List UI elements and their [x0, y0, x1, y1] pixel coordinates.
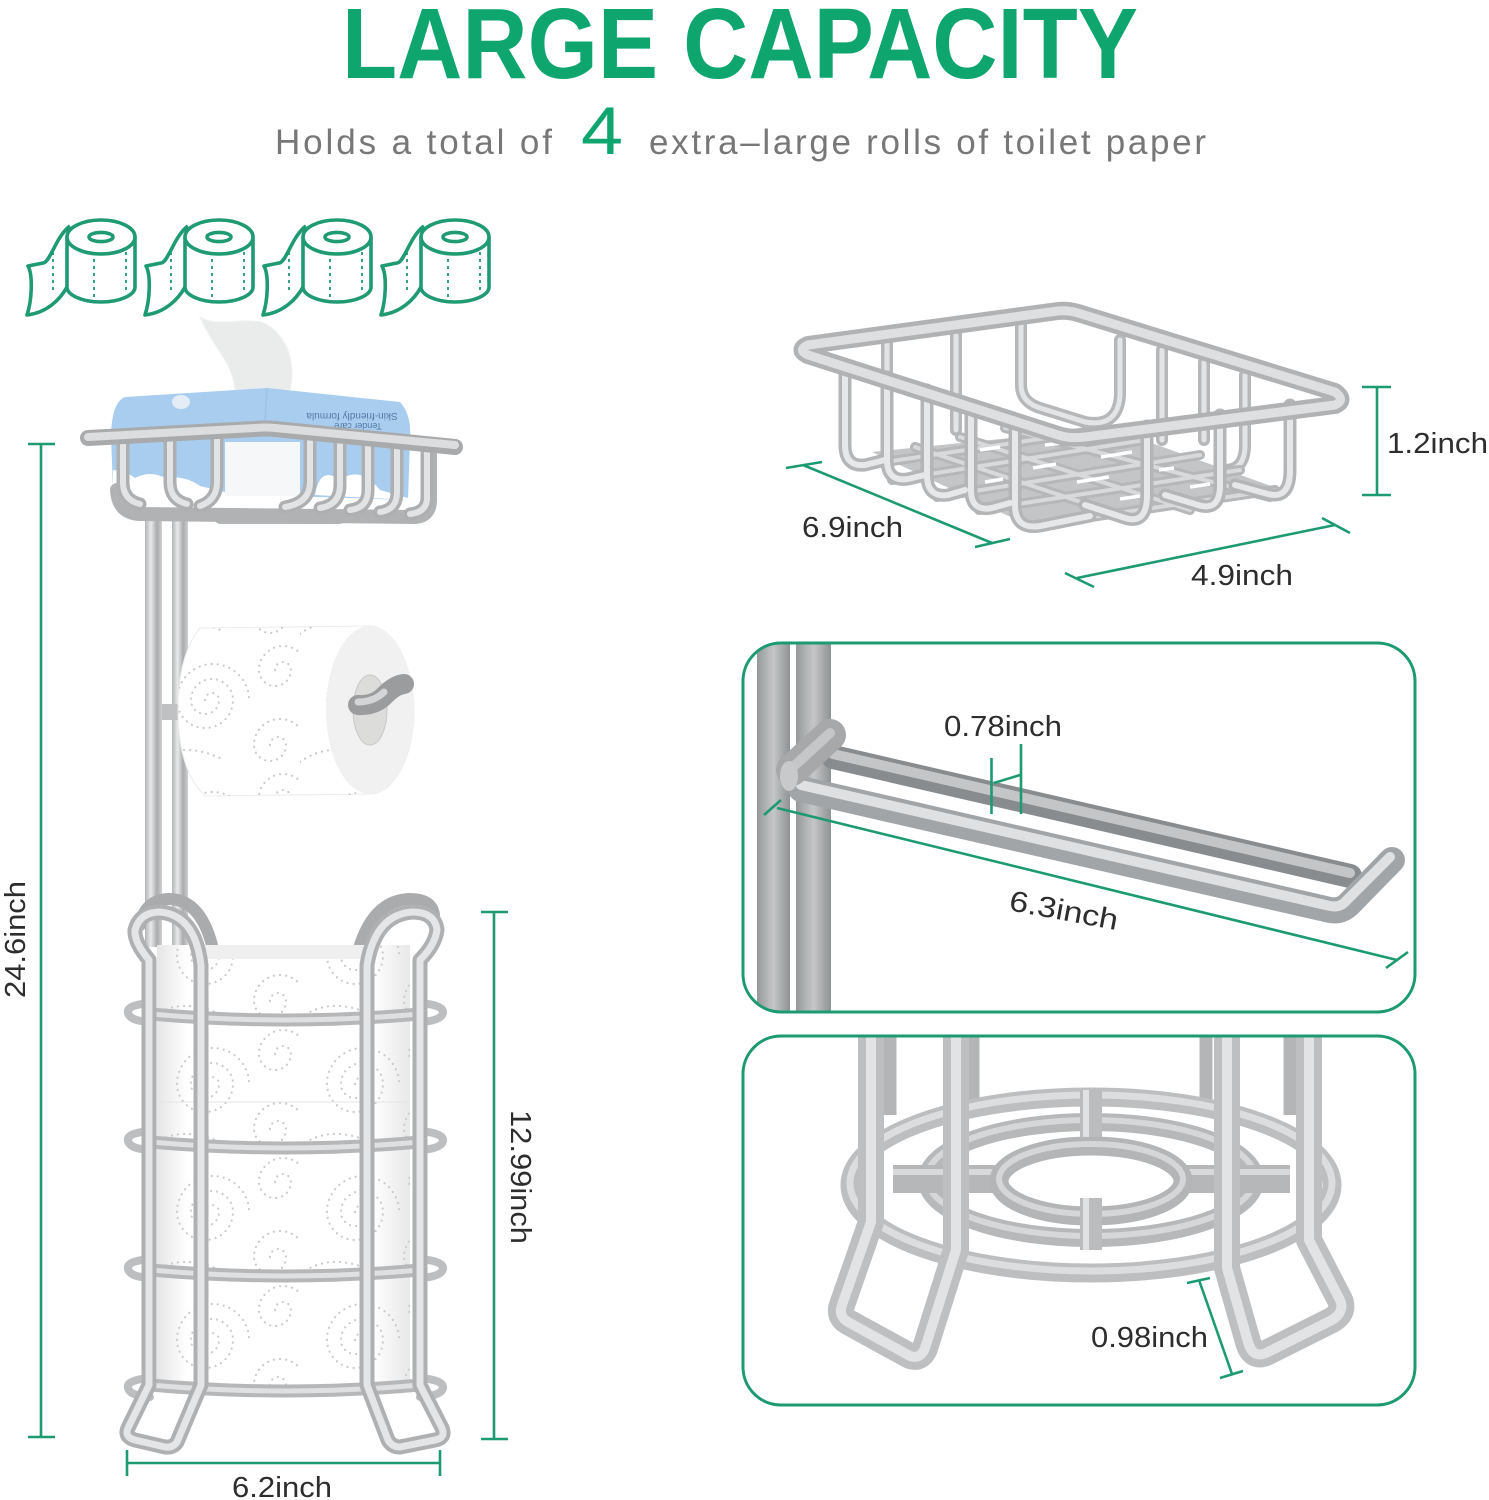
wipes package: [111, 388, 410, 500]
wire shelf basket: [88, 428, 455, 524]
panel border: [743, 1036, 1415, 1405]
subtitle: [275, 93, 1206, 169]
stand posts: [145, 512, 188, 947]
dimension: 6.3inch: [764, 800, 1408, 968]
lower basket holding rolls: [127, 899, 443, 1447]
dimension: 6.9inch: 6.9inch: [802, 512, 903, 544]
tissue pulled from wipes pack: [200, 317, 292, 390]
icon: toilet roll 2: [145, 220, 253, 315]
product: full stand: [88, 317, 455, 1447]
dimension: height 24.6inch: 24.6inch: [0, 881, 32, 998]
dimension: 6.3inch: 6.3inch: [1007, 885, 1121, 937]
subtitle: extra–large rolls of toilet paper: [649, 123, 1206, 162]
back arches: [140, 899, 434, 945]
icon: toilet roll 3: [263, 220, 371, 315]
stacked rolls: [157, 945, 410, 1392]
dimension: 1.2inch: [1362, 387, 1488, 495]
dimension: 4.9inch: 4.9inch: [1191, 560, 1293, 592]
horizontal rings: [128, 1003, 443, 1397]
detail: shelf basket: [802, 311, 1340, 527]
dimension: 6.9inch: [786, 462, 1010, 547]
dimension: 0.98inch: 0.98inch: [1091, 1322, 1208, 1354]
dimension: width 6.2inch: [127, 1450, 440, 1500]
dimension: 1.2inch: 1.2inch: [1387, 428, 1488, 460]
subtitle: Holds a total of: [275, 123, 552, 162]
panel: hook detail: [743, 643, 1415, 1012]
dimension: 4.9inch: [1065, 518, 1350, 592]
front posts, arches and feet: [127, 912, 443, 1447]
panel: base detail: [743, 1030, 1415, 1405]
dimension: basket height 12.99inch: [481, 912, 536, 1439]
dimension: 0.78inch: [944, 711, 1062, 814]
subtitle: 4: [581, 93, 623, 169]
panel border: [743, 643, 1415, 1012]
hook rods: [780, 733, 1392, 910]
icon: toilet roll 1: [27, 220, 135, 315]
hook posts: [757, 643, 831, 1012]
dimension: basket height 12.99inch: 12.99inch: [504, 1110, 536, 1244]
icon row: four toilet rolls: [27, 220, 489, 315]
icon: toilet roll 4: [381, 220, 489, 315]
dimension: 0.78inch: 0.78inch: [944, 711, 1062, 743]
dimension: 0.98inch: [1091, 1278, 1243, 1378]
base rings: [841, 1030, 1341, 1357]
dimension: height 24.6inch: [0, 444, 55, 1437]
wipes package: Skin-friendly formula: [306, 410, 398, 421]
wipes package: Tender care: [334, 421, 382, 431]
paper roll on hook: [162, 626, 414, 796]
